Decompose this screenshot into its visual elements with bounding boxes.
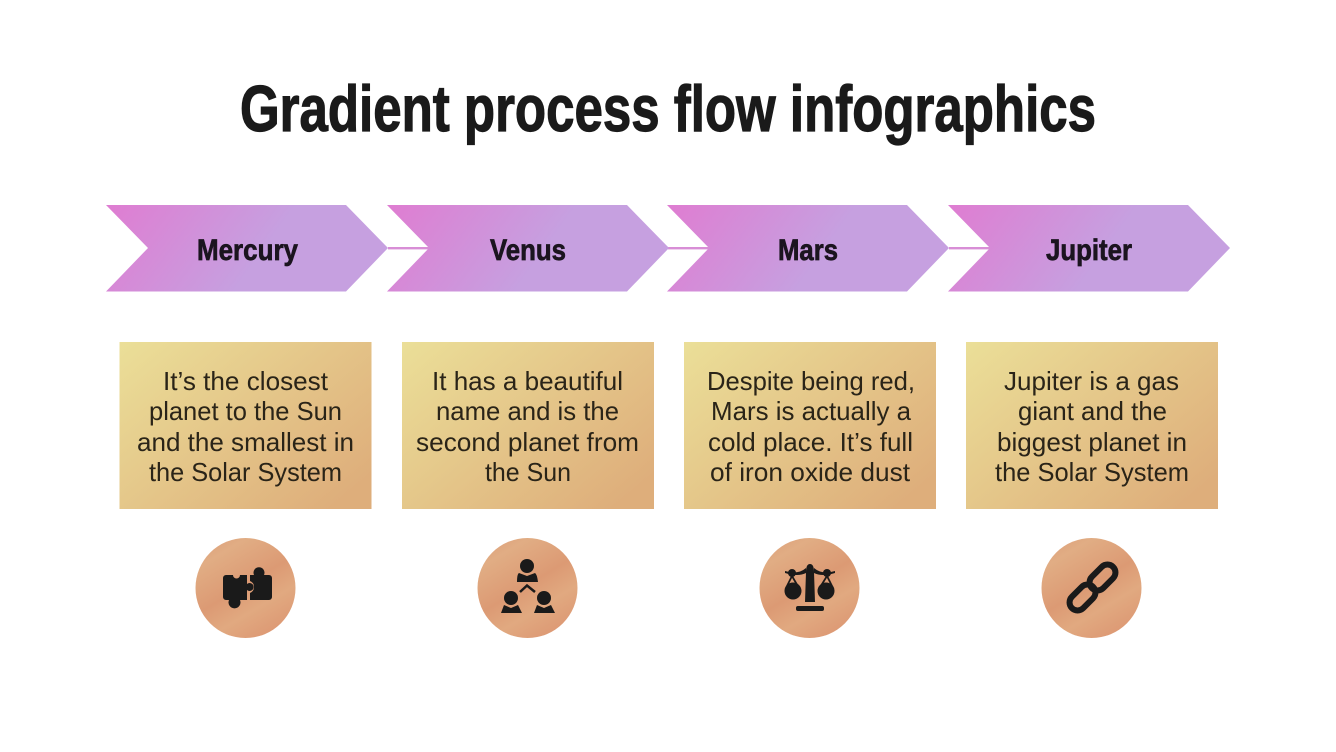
box: Mercury description: planet to the Sun	[149, 396, 342, 426]
icon: people network	[478, 538, 578, 638]
box: Mercury description: It’s the closest	[163, 366, 329, 396]
box: Venus description: It has a beautiful	[432, 366, 623, 396]
box: Mercury description	[120, 342, 372, 509]
box: Mars description: of iron oxide dust	[710, 457, 911, 487]
box: Jupiter description	[966, 342, 1218, 509]
title: Gradient process flow infographics	[240, 72, 1096, 145]
box: Mars description: Despite being red,	[707, 366, 915, 396]
chevron: Mercury	[106, 205, 388, 292]
connector: Mars to Jupiter	[949, 247, 991, 249]
description boxes	[120, 342, 1218, 509]
icon: puzzle	[196, 538, 296, 638]
box: Mars description	[684, 342, 936, 509]
box: Jupiter description: the Solar System	[995, 457, 1189, 487]
box: Mercury description: the Solar System	[149, 457, 342, 487]
process chevrons	[106, 205, 1230, 292]
chevron: Mars: Mars	[778, 234, 838, 267]
box: Mercury description: and the smallest in	[137, 427, 354, 457]
chevron: Venus: Venus	[490, 234, 566, 267]
chevron: Venus	[387, 205, 669, 292]
box: Venus description: the Sun	[485, 457, 571, 487]
connector: Venus to Mars	[668, 247, 710, 249]
chevron: Mercury: Mercury	[197, 234, 298, 267]
box: Venus description	[402, 342, 654, 509]
box: Jupiter description: Jupiter is a gas	[1004, 366, 1179, 396]
chevron: Jupiter: Jupiter	[1046, 234, 1132, 267]
chevron: Jupiter	[948, 205, 1230, 292]
box: Jupiter description: giant and the	[1018, 396, 1167, 426]
icon: chain link	[1042, 538, 1142, 638]
box: Jupiter description: biggest planet in	[997, 427, 1187, 457]
icons row	[196, 538, 1142, 638]
box: Venus description: name and is the	[436, 396, 619, 426]
box: Mars description: Mars is actually a	[711, 396, 912, 426]
box: Mars description: cold place. It’s full	[708, 427, 913, 457]
chevron: Mars	[667, 205, 949, 292]
connector: Mercury to Venus	[388, 247, 430, 249]
icon: balance scale	[760, 538, 860, 638]
box: Venus description: second planet from	[416, 427, 639, 457]
